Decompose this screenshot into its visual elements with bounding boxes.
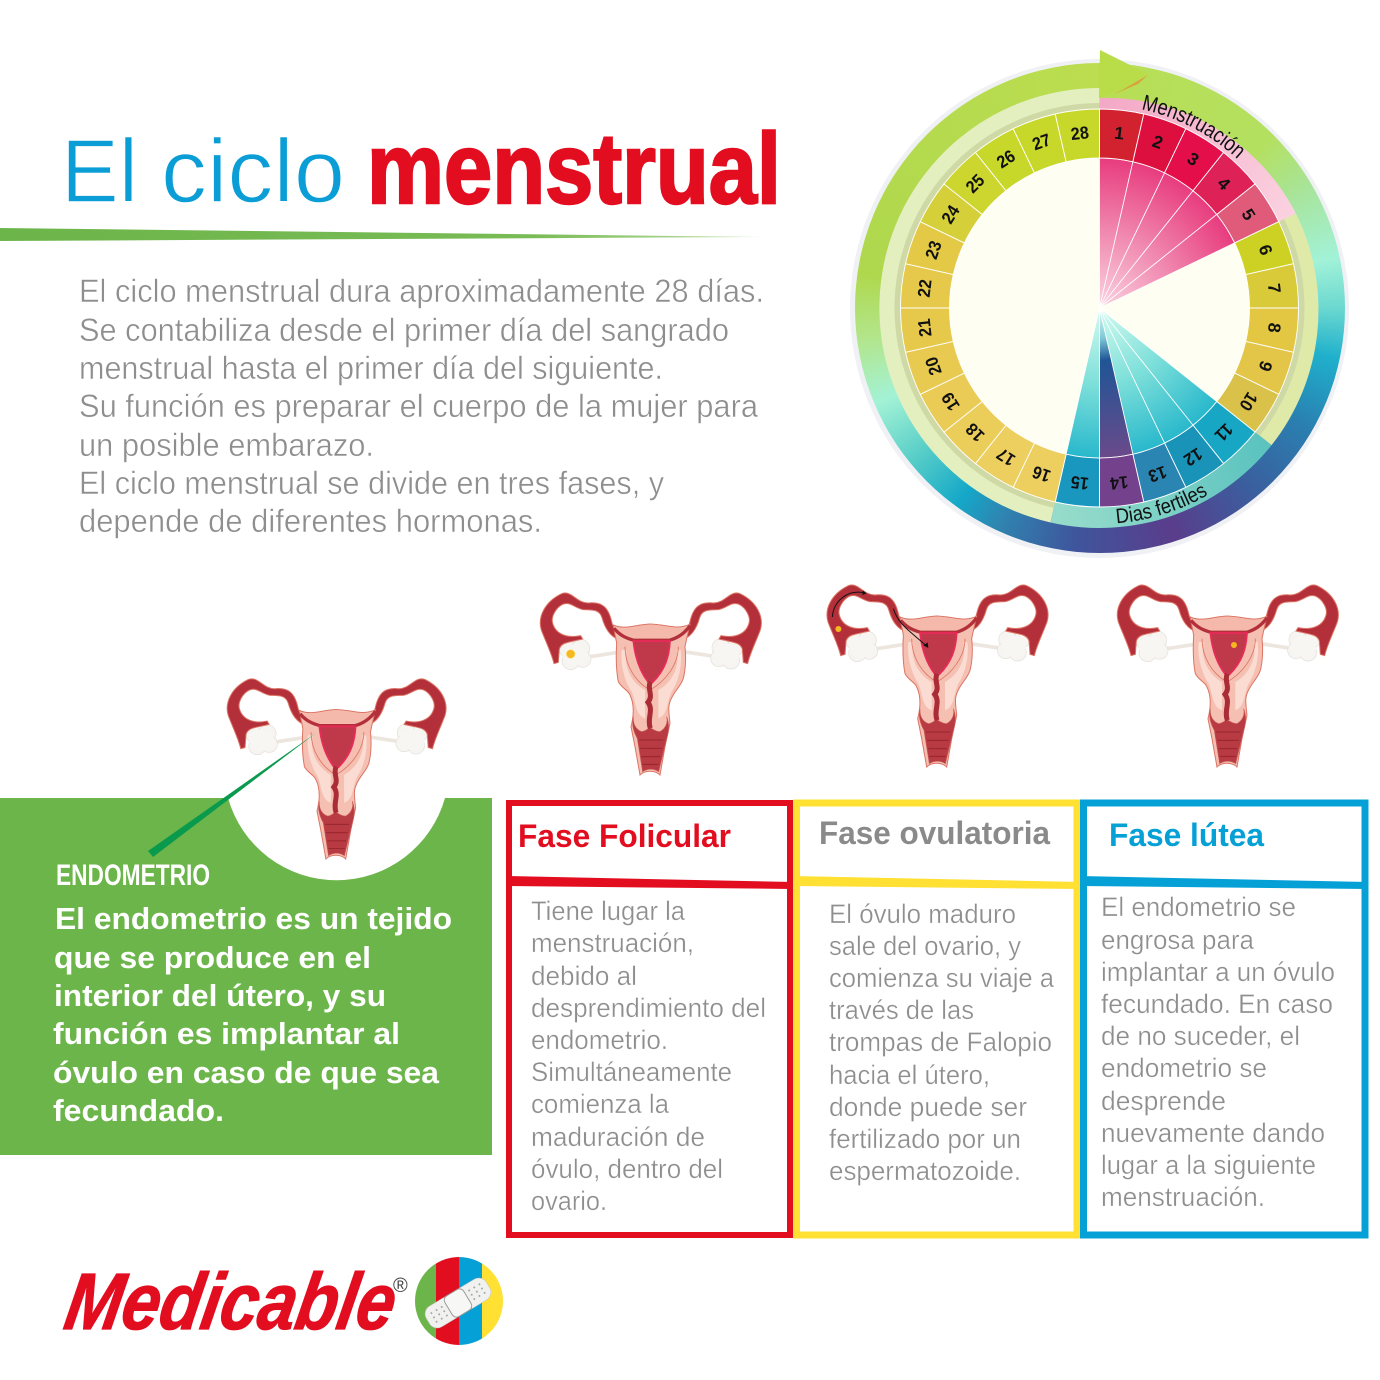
day numbers: 24: [937, 201, 964, 227]
body text: espermatozoide.: [829, 1156, 1021, 1186]
day numbers: 7: [1264, 282, 1285, 294]
uterus: fase folicular: [540, 593, 761, 775]
body text: Simultáneamente: [531, 1057, 732, 1087]
body text: óvulo, dentro del: [531, 1154, 723, 1184]
endometrio text: óvulo en caso de que sea: [53, 1055, 440, 1090]
pale band left and right: [879, 88, 1318, 522]
intro text: menstrual hasta el primer día del siguiente.: [79, 350, 663, 386]
day numbers: [914, 122, 1285, 494]
title: [61, 113, 781, 225]
body text: menstruación.: [1101, 1182, 1265, 1212]
menstruation band: [1100, 98, 1296, 222]
endometrio text: que se produce en el: [54, 940, 371, 975]
body text: nuevamente dando: [1101, 1118, 1325, 1148]
panel: fase ovulatoria: [793, 803, 1080, 1235]
day numbers: 20: [921, 354, 946, 378]
logo badge: [415, 1257, 503, 1345]
day numbers: 27: [1030, 129, 1053, 154]
endometrio text: El endometrio es un tejido: [55, 901, 452, 936]
heading: Fase Folicular: [518, 818, 731, 854]
intro text: El ciclo menstrual se divide en tres fases, y: [79, 465, 664, 501]
body text: menstruación,: [531, 928, 694, 958]
title: menstrual: [367, 113, 781, 225]
panel: fase lútea: [1080, 803, 1368, 1235]
day numbers: 13: [1146, 462, 1169, 487]
body text: [829, 899, 1055, 1186]
body text: maduración de: [531, 1122, 705, 1152]
intro text: El ciclo menstrual dura aproximadamente 28 días.: [79, 273, 764, 309]
body text: engrosa para: [1101, 925, 1255, 955]
body text: hacia el útero,: [829, 1060, 990, 1090]
sperm path arrows: [832, 590, 928, 648]
endometrio text: interior del útero, y su: [54, 978, 386, 1013]
body text: El endometrio se: [1101, 892, 1296, 922]
uterus: endometrio: [227, 679, 446, 859]
day numbers: 23: [921, 238, 946, 262]
day numbers: 3: [1184, 148, 1203, 170]
uterus: fase ovulatoria: [827, 585, 1048, 767]
intro text: Su función es preparar el cuerpo de la mujer para: [79, 388, 758, 424]
uterus: fase lútea: [1117, 585, 1338, 767]
day numbers: 5: [1237, 205, 1260, 224]
fertile days band: [1050, 432, 1272, 528]
day numbers: 26: [993, 146, 1019, 172]
day numbers: 16: [1029, 462, 1053, 487]
body text: desprende: [1101, 1086, 1226, 1116]
day numbers: 21: [914, 317, 936, 338]
ovum: [1231, 642, 1237, 648]
registered mark: ®: [393, 1275, 408, 1297]
fertile wedges: [1066, 308, 1217, 462]
day segments: [896, 104, 1303, 512]
body text: lugar a la siguiente: [1101, 1150, 1316, 1180]
day numbers: 6: [1255, 242, 1277, 258]
body text: desprendimiento del: [531, 993, 766, 1023]
day numbers: 2: [1150, 131, 1166, 153]
cycle wheel: [879, 88, 1318, 528]
heading: Fase lútea: [1109, 817, 1264, 853]
body text: [1101, 892, 1335, 1212]
endometrio text: fecundado.: [53, 1093, 224, 1128]
body text: comienza la: [531, 1089, 670, 1119]
body text: comienza su viaje a: [829, 963, 1055, 993]
logo: [59, 1257, 503, 1347]
cream centre: [950, 158, 1250, 458]
wheel halo: [850, 59, 1349, 558]
ovum: [835, 626, 841, 632]
ovum: [566, 650, 575, 658]
endometrio text: función es implantar al: [53, 1016, 400, 1051]
label: Días fertiles: Dias fertiles: [1116, 486, 1207, 524]
cycle arrow head: [1099, 50, 1148, 98]
label: Menstruación: Menstruación: [1142, 94, 1244, 158]
body text: endometrio.: [531, 1025, 668, 1055]
body text: de no suceder, el: [1101, 1021, 1300, 1051]
bandage: [424, 1278, 492, 1328]
body text: través de las: [829, 995, 974, 1025]
panel: endometrio: [0, 679, 492, 1155]
body text: implantar a un óvulo: [1101, 957, 1335, 987]
panel: fase folicular: [506, 803, 793, 1235]
day numbers: 10: [1235, 389, 1262, 415]
menstruation wedges: [1100, 158, 1238, 334]
body text: debido al: [531, 961, 637, 991]
endometrio text: [53, 901, 452, 1128]
body text: Tiene lugar la: [531, 896, 686, 926]
title underline: [0, 228, 762, 241]
intro text: un posible embarazo.: [79, 427, 374, 463]
day numbers: 12: [1180, 444, 1206, 470]
body text: trompas de Falopio: [829, 1027, 1052, 1057]
body text: El óvulo maduro: [829, 899, 1016, 929]
body text: endometrio se: [1101, 1053, 1267, 1083]
body text: sale del ovario, y: [829, 931, 1021, 961]
day numbers: 25: [962, 170, 989, 197]
day numbers: 1: [1113, 123, 1125, 144]
body text: fecundado. En caso: [1101, 989, 1333, 1019]
day numbers: 18: [961, 419, 988, 446]
day numbers: 19: [937, 388, 964, 415]
intro text: Se contabiliza desde el primer día del sangrado: [79, 312, 729, 348]
intro text: depende de diferentes hormonas.: [79, 503, 542, 539]
intro text: [79, 273, 764, 539]
body text: fertilizado por un: [829, 1124, 1021, 1154]
title: ciclo: [161, 122, 345, 222]
title: El: [61, 122, 138, 222]
pointer line: [148, 733, 316, 857]
body text: ovario.: [531, 1186, 607, 1216]
heading: Fase ovulatoria: [819, 815, 1050, 851]
body text: donde puede ser: [829, 1092, 1027, 1122]
endometrio heading: ENDOMETRIO: [56, 859, 210, 892]
day numbers: 28: [1070, 122, 1090, 144]
day numbers: 17: [993, 444, 1019, 470]
day numbers: 4: [1213, 173, 1235, 194]
wordmark: Medicable: [59, 1258, 404, 1347]
day numbers: 14: [1109, 472, 1129, 494]
body text: [531, 896, 766, 1216]
day numbers: 11: [1211, 419, 1237, 446]
wheel outer gradient ring: [854, 63, 1344, 553]
day numbers: 15: [1069, 472, 1090, 494]
day numbers: 22: [914, 278, 936, 298]
day numbers: 9: [1254, 358, 1277, 374]
day numbers: 8: [1264, 322, 1285, 334]
